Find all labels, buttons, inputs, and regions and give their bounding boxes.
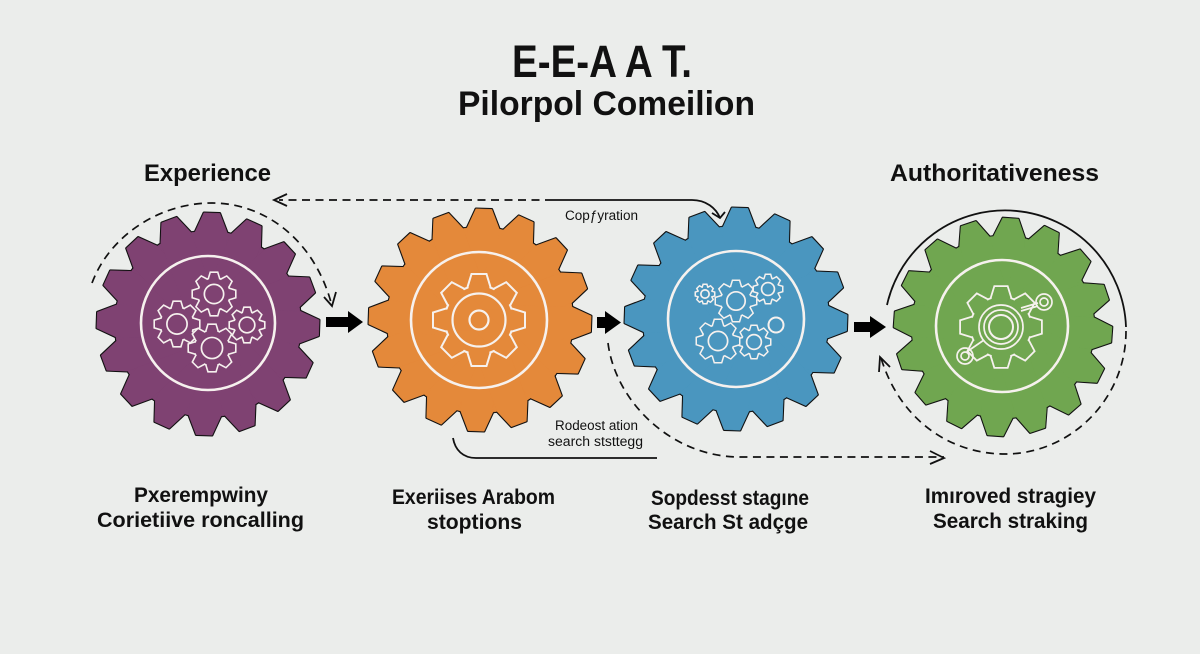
title: [458, 36, 755, 123]
arrow: solid curve under orange gear: [453, 438, 657, 458]
gear: green authoritativeness: [887, 211, 1119, 443]
inner ring: [936, 260, 1068, 392]
label: Copyration: Copƒyration: [565, 208, 638, 223]
arrow: top feedback line from blue gear to experience: [274, 194, 725, 218]
icon: four small gears: [155, 273, 264, 371]
label: Rodeost ation search ststtegg: Rodeost ation: [555, 418, 638, 433]
caption: expertise: Exeriises Arabom: [392, 486, 555, 509]
caption: experience: [97, 484, 304, 532]
gear: blue: [621, 204, 851, 434]
label: Rodeost ation search ststtegg: search ststtegg: [548, 434, 643, 449]
caption: improved strategy: [925, 485, 1096, 533]
caption: expertise: [392, 486, 555, 534]
inner ring: [668, 251, 804, 387]
arrow: orange to blue: [597, 311, 621, 334]
gear: purple experience: [93, 209, 323, 439]
caption: improved strategy: Imıroved stragiey: [925, 485, 1096, 508]
title: E-E-A A T.: [512, 36, 692, 87]
icon: cluster of small gears: [696, 275, 784, 362]
arrow: dashed loop around purple gear: [92, 203, 336, 306]
heading: Experience: Experience: [144, 160, 271, 187]
caption: search stage: [648, 487, 809, 534]
caption: experience: Corietiive roncalling: [97, 509, 304, 532]
caption: expertise: stoptions: [427, 511, 522, 534]
icon: single gear: [434, 275, 524, 365]
inner ring: [141, 256, 275, 390]
caption: search stage: Sopdesst stagıne: [651, 487, 809, 510]
caption: improved strategy: Search straking: [933, 510, 1088, 533]
arrow: dashed curve under blue gear to green gear: [608, 343, 944, 464]
arrow: blue to green: [854, 316, 886, 338]
arrow: purple to orange: [326, 311, 363, 333]
caption: search stage: Search St adçge: [648, 511, 808, 534]
heading: Authoritativeness: Authoritativeness: [890, 160, 1099, 187]
caption: experience: Pxerempwiny: [134, 484, 268, 507]
icon: gear with rings and nodes: [957, 287, 1052, 367]
title: Pilorpol Comeilion: [458, 85, 755, 123]
arrow: circular loop around green gear: [879, 210, 1126, 454]
label: Rodeost ation search ststtegg: [548, 418, 643, 449]
gear: orange expertise: [365, 205, 595, 435]
inner ring: [411, 252, 547, 388]
